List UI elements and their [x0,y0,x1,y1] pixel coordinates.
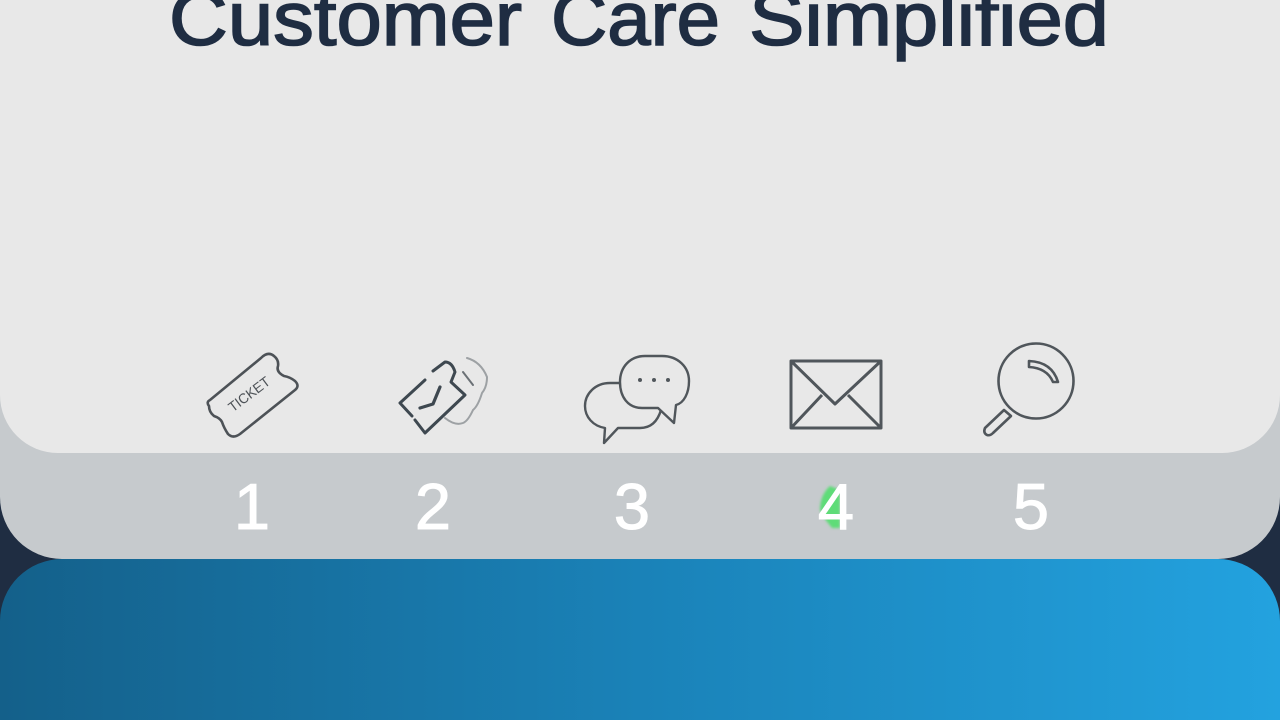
step numbers [234,470,1049,543]
panel: light main card [0,0,1280,453]
number 5: 5 [1013,470,1049,543]
icon: check document and hand [400,358,487,433]
icon: ticket [208,354,298,436]
number 4: 4 [818,470,854,543]
panel: blue footer [0,559,1280,720]
panel: grey number band [0,0,1280,559]
icon: ticket: TICKET [225,373,273,415]
number 3: 3 [614,470,650,543]
chat dots [638,378,670,382]
icon: envelope [791,361,881,428]
number 1: 1 [234,470,270,543]
icon: magnifying glass [984,344,1074,435]
number 2: 2 [415,470,451,543]
icon: chat bubbles [585,356,689,443]
green smudge on number 4 [820,486,840,528]
